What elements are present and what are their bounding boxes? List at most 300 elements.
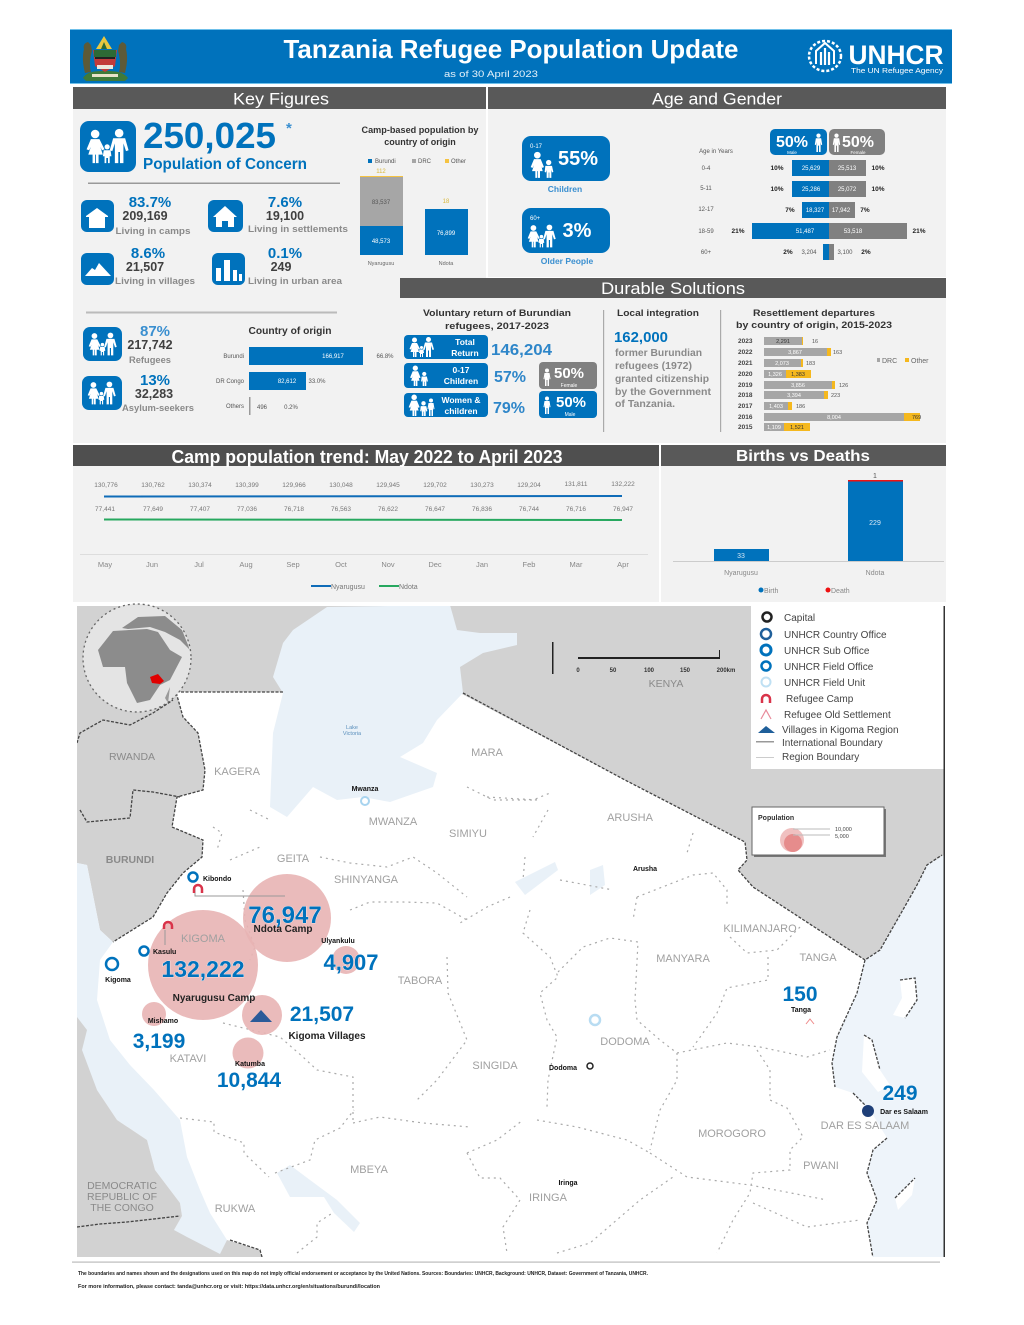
header banner: [70, 29, 952, 84]
stat: living in urban area: 0.1%: [268, 245, 302, 262]
line chart: camp population: May: [98, 560, 112, 569]
voluntary return block: refugees, 2017-2023: [445, 321, 549, 332]
line chart: camp population: 77,649: [143, 506, 163, 513]
local integration block: former Burundian: [615, 348, 702, 359]
map region and country labels: BURUNDI: [106, 854, 154, 866]
local integration block: Local integration: [617, 308, 699, 319]
stat: refugees: Refugees: [129, 355, 171, 366]
map figures: Ndota Camp: [254, 924, 312, 935]
icon: family tile: [80, 121, 136, 172]
map region and country labels: IRINGA: [529, 1192, 568, 1204]
stacked chart: camp-based population: Nyarugusu: [368, 261, 394, 267]
icon: Tanzania coat of arms: [83, 36, 128, 81]
map region and country labels: PWANI: [803, 1160, 839, 1172]
title: Tanzania Refugee Population Update: [284, 34, 738, 64]
population pyramid: 25,513: [838, 166, 857, 172]
bar chart: resettlement departures: 2016: [738, 414, 753, 421]
bar chart: resettlement departures: 2,291: [776, 339, 790, 345]
heading: age and gender: Age and Gender: [652, 90, 782, 108]
stat: asylum-seekers: 13%: [140, 372, 170, 389]
stacked chart: camp-based population: 112: [376, 169, 386, 175]
population pyramid: 25,629: [802, 166, 821, 172]
bar chart: resettlement departures: [736, 308, 929, 431]
map region and country labels: SIMIYU: [449, 828, 487, 840]
date subtitle: as of 30 April 2023: [444, 69, 538, 80]
population pyramid: 10%: [770, 186, 784, 193]
bar chart: births and deaths: 1: [873, 473, 877, 480]
legend: map symbols: Capital: [784, 613, 815, 624]
stat: asylum-seekers: Asylum-seekers: [122, 403, 194, 414]
international boundaries: [77, 692, 942, 1258]
bar chart: resettlement departures: 163: [833, 350, 842, 356]
tile: older people: Older People: [541, 256, 593, 266]
bar chart: country of origin: 66.8%: [376, 354, 394, 360]
map region and country labels: [87, 678, 909, 1215]
stat: living in urban area: Living in urban area: [248, 276, 343, 287]
tile: older people: 60+: [530, 216, 541, 222]
tile: female share: Female: [561, 383, 578, 389]
map region and country labels: KILIMANJARO: [723, 923, 797, 935]
tile: male share: 50%: [556, 394, 586, 411]
map scale bar: 200km: [717, 668, 735, 674]
map place markers: Dodoma: [549, 1065, 577, 1072]
population pyramid: 2%: [783, 249, 793, 256]
bar chart: country of origin: 496: [257, 405, 268, 411]
map region and country labels: THE CONGO: [90, 1202, 154, 1214]
stat: living in camps: 209,169: [122, 209, 168, 223]
tile: women and children: 79%: [493, 400, 525, 417]
stacked chart: camp-based population: DRC: [418, 159, 432, 165]
stat: living in settlements: [208, 194, 348, 235]
stat: living in villages: Living in villages: [115, 276, 195, 287]
stat: living in urban area: [212, 245, 343, 287]
stacked chart: camp-based population: Other: [451, 159, 466, 165]
tile: children: 57%: [494, 369, 526, 386]
line chart: camp population: 129,966: [282, 482, 306, 489]
map scale bar: 0: [576, 668, 580, 674]
total population figure: [143, 115, 307, 173]
map figures: 249: [882, 1082, 918, 1105]
male share tile: 50%: [776, 134, 808, 151]
stat: living in settlements: 7.6%: [268, 194, 302, 211]
population pyramid: 18,327: [806, 208, 825, 214]
map region and country labels: DODOMA: [600, 1036, 650, 1048]
map place markers: Arusha: [633, 866, 657, 873]
total population figure: Population of Concern: [143, 156, 307, 173]
legend: population bubbles: 10,000: [835, 827, 852, 833]
female share tile: [829, 129, 885, 155]
map figures: 76,947: [248, 902, 322, 929]
tile: female share: 50%: [554, 365, 584, 382]
stat: living in camps: 83.7%: [129, 194, 171, 211]
line chart: camp population: 132,222: [611, 481, 635, 488]
tile: total return: [404, 335, 552, 359]
map figures: 21,507: [290, 1003, 354, 1026]
legend: map symbols: Refugee Camp: [786, 694, 854, 705]
population pyramid: 2%: [861, 249, 871, 256]
stat: refugees: 87%: [140, 323, 170, 340]
bar chart: resettlement departures: 3,867: [788, 350, 802, 356]
tile: male share: Male: [565, 412, 576, 418]
map figures: [133, 902, 918, 1105]
map region and country labels: KATAVI: [170, 1053, 206, 1065]
bar chart: resettlement departures: 186: [796, 404, 805, 410]
bar chart: resettlement departures: 183: [806, 361, 815, 367]
male share tile: [770, 129, 827, 155]
population pyramid: 0-4: [702, 166, 711, 172]
stacked chart: camp-based population: country of origin: [384, 137, 456, 147]
female share tile: 50%: [842, 134, 874, 151]
bar chart: resettlement departures: 1,109: [767, 425, 781, 431]
map figures: 132,222: [161, 956, 245, 982]
map place markers: [105, 786, 928, 1187]
bar chart: resettlement departures: 223: [831, 393, 840, 399]
legend: map symbols: UNHCR Field Office: [784, 662, 874, 673]
line chart: camp population: 130,374: [188, 482, 212, 489]
line chart: camp population: Apr: [617, 560, 629, 569]
line chart: camp population: 129,945: [376, 482, 400, 489]
line chart: camp population: 76,647: [425, 506, 445, 513]
population pyramid: 3,204: [801, 250, 817, 256]
bar chart: births and deaths: Ndota: [866, 570, 884, 577]
tile: children: 55%: [558, 148, 598, 170]
stat: refugees: [83, 323, 173, 366]
legend: map symbols: UNHCR Field Unit: [784, 678, 865, 689]
population pyramid: Age in Years: [699, 149, 733, 155]
map scale bar: 50: [610, 668, 617, 674]
line chart: camp population: Sep: [286, 560, 300, 569]
map region and country labels: ARUSHA: [607, 812, 654, 824]
heading: camp population trend: Camp population trend: May 2022 to April 2023: [172, 447, 562, 467]
bar chart: country of origin: DR Congo: [216, 379, 245, 385]
bar chart: resettlement departures: 2020: [738, 371, 753, 378]
map figures: Nyarugusu Camp: [173, 993, 255, 1004]
stacked chart: camp-based population: [360, 125, 478, 267]
stacked chart: camp-based population: 18: [443, 199, 450, 205]
map place markers: Mwanza: [352, 786, 379, 793]
bar chart: country of origin: Burundi: [223, 354, 244, 360]
line chart: camp population: 76,622: [378, 506, 398, 513]
legend: map symbols: Villages in Kigoma Region: [782, 725, 899, 736]
stacked chart: camp-based population: 48,573: [372, 239, 391, 245]
population pyramid: 21%: [731, 228, 745, 235]
total population figure: *: [286, 120, 292, 137]
stat: living in villages: 8.6%: [131, 245, 165, 262]
bar chart: country of origin: 0.2%: [284, 405, 298, 411]
line chart: camp population: Feb: [523, 560, 535, 569]
bar chart: country of origin: [216, 325, 394, 415]
map place markers: Kibondo: [203, 876, 231, 883]
stat: living in urban area: 249: [271, 260, 291, 274]
bar chart: country of origin: 166,917: [322, 354, 344, 360]
line chart: camp population: 76,563: [331, 506, 351, 513]
population pyramid: [698, 129, 926, 260]
map region and country labels: TABORA: [398, 975, 443, 987]
panel: camp population trend: [73, 445, 659, 602]
bar chart: resettlement departures: 2021: [738, 360, 753, 367]
population pyramid: 21%: [912, 228, 926, 235]
map place markers: Tanga: [791, 1007, 811, 1014]
line chart: camp population: Jun: [146, 560, 158, 569]
bar chart: births and deaths: Death: [831, 588, 850, 595]
tile: older people: 3%: [563, 220, 592, 242]
tile: children: [404, 363, 526, 388]
population pyramid: 25,072: [838, 187, 857, 193]
stat: living in villages: [81, 245, 195, 287]
legend: population bubbles: 5,000: [835, 834, 849, 840]
map scale bar: 100: [644, 668, 655, 674]
legend: population bubbles: [752, 807, 886, 857]
stacked chart: camp-based population: Ndota: [439, 261, 454, 267]
tile: older people: [522, 208, 610, 266]
stat: asylum-seekers: [82, 372, 194, 414]
map region and country labels: KENYA: [649, 678, 683, 690]
population pyramid: 7%: [785, 207, 795, 214]
heading: durable solutions: Durable Solutions: [601, 279, 745, 298]
bar chart: resettlement departures: by country of origin, 2015-2023: [736, 320, 892, 331]
map: Tanzania refugee locations: KIGOMA: [181, 933, 226, 945]
map region and country labels: SINGIDA: [472, 1060, 518, 1072]
line chart: camp population: 129,204: [517, 482, 541, 489]
footer notes: [72, 1262, 940, 1290]
line chart: camp population: Nov: [381, 560, 395, 569]
map figures: Kigoma Villages: [288, 1031, 366, 1042]
map figures: 3,199: [133, 1030, 185, 1053]
bar chart: resettlement departures: 2022: [738, 349, 753, 356]
bar chart: resettlement departures: 126: [839, 383, 848, 389]
bar chart: resettlement departures: 2023: [738, 338, 753, 345]
tile: total return: Return: [451, 348, 479, 358]
population pyramid: 10%: [871, 186, 885, 193]
line chart: camp population: 76,947: [613, 506, 633, 513]
map region and country labels: REPUBLIC OF: [87, 1191, 157, 1203]
map place markers: Kigoma: [105, 977, 131, 984]
camp bubbles: [142, 874, 360, 1068]
tile: children: Children: [444, 376, 478, 386]
map figures: 150: [782, 983, 818, 1006]
line chart: camp population: 76,716: [566, 506, 586, 513]
map region and country labels: DEMOCRATIC: [87, 1180, 157, 1192]
bar chart: births and deaths: 229: [869, 520, 881, 527]
heading: key figures: Key Figures: [233, 90, 329, 108]
local integration block: of Tanzania.: [615, 399, 675, 410]
map region and country labels: MWANZA: [369, 816, 418, 828]
line chart: camp population: 77,407: [190, 506, 210, 513]
bar chart: births and deaths: [673, 473, 944, 595]
bar chart: resettlement departures: 1,383: [791, 372, 805, 378]
bar chart: resettlement departures: 2018: [738, 392, 753, 399]
tile: female share: [539, 362, 597, 389]
line chart: camp population: [80, 481, 648, 591]
voluntary return block: Voluntary return of Burundian: [423, 308, 571, 319]
map scale bar: [552, 642, 735, 674]
map region and country labels: TANGA: [799, 952, 837, 964]
map region and country labels: MANYARA: [656, 953, 710, 965]
population pyramid: 7%: [860, 207, 870, 214]
line chart: camp population: 130,048: [329, 482, 353, 489]
map region and country labels: SHINYANGA: [334, 874, 399, 886]
map region and country labels: Victoria: [343, 731, 362, 737]
population pyramid: 5-11: [700, 186, 712, 192]
panel: births vs deaths: [661, 445, 946, 602]
legend: map symbols: UNHCR Sub Office: [784, 646, 870, 657]
local integration block: granted citizenship: [615, 374, 709, 385]
bar chart: resettlement departures: Resettlement departures: [753, 308, 875, 319]
map region and country labels: DAR ES SALAAM: [821, 1120, 909, 1132]
bar chart: country of origin: 33.0%: [308, 379, 326, 385]
line chart: camp population: Aug: [239, 560, 253, 569]
tile: male share: [539, 391, 597, 418]
region boundaries: [180, 787, 860, 1253]
line chart: camp population: Jan: [476, 560, 488, 569]
legend: map symbols: Region Boundary: [782, 752, 859, 763]
tile: women and children: [404, 393, 525, 417]
population pyramid: 53,518: [844, 229, 863, 235]
population pyramid: 25,286: [802, 187, 821, 193]
line chart: camp population: 130,399: [235, 482, 259, 489]
bar chart: births and deaths: Birth: [764, 588, 778, 595]
local integration block: [614, 308, 712, 410]
footer notes: For more information, please contact: tanda@unhcr.org or visit: https://data.unhcr.org/en/situations/burundi/location: [78, 1284, 380, 1290]
bar chart: births and deaths: 33: [737, 553, 745, 560]
map figures: 4,907: [323, 950, 379, 975]
map region and country labels: GEITA: [277, 853, 310, 865]
bar chart: resettlement departures: Other: [911, 358, 929, 365]
line chart: camp population: 130,273: [470, 482, 494, 489]
map region and country labels: MARA: [471, 747, 504, 759]
tile: women and children: children: [444, 406, 478, 416]
bar chart: country of origin: Others: [226, 404, 244, 410]
heading: births vs deaths: Births vs Deaths: [736, 448, 870, 465]
population pyramid: 17,942: [832, 208, 851, 214]
footer notes: The boundaries and names shown and the designations used on this map do not imply official endorsement or acceptance by the United Nations. Sources: Boundaries: UNHCR, Background: UNHCR, Dataset: Government of Tanzania, UNHCR.: [78, 1271, 649, 1277]
map region and country labels: MOROGORO: [698, 1128, 766, 1140]
line chart: camp population: 129,702: [423, 482, 447, 489]
line chart: camp population: Jul: [194, 560, 204, 569]
inset: globe locator: [83, 604, 191, 712]
line chart: camp population: Ndota: [399, 584, 418, 591]
line chart: camp population: 76,718: [284, 506, 304, 513]
line chart: camp population: 131,811: [564, 481, 588, 488]
bar chart: resettlement departures: 1,403: [769, 404, 783, 410]
map region and country labels: RWANDA: [109, 751, 155, 763]
stat: living in villages: 21,507: [126, 260, 164, 274]
map region and country labels: MBEYA: [350, 1164, 389, 1176]
line chart: camp population: 77,036: [237, 506, 257, 513]
stat: asylum-seekers: 32,283: [135, 387, 173, 401]
bar chart: resettlement departures: 2,073: [775, 361, 789, 367]
population pyramid: 60+: [701, 250, 712, 256]
map region and country labels: RUKWA: [215, 1203, 256, 1215]
UNHCR logo text: UNHCR: [848, 40, 944, 70]
population pyramid: 18-59: [698, 229, 714, 235]
line chart: camp population: 77,441: [95, 506, 115, 513]
map place markers: Iringa: [558, 1180, 578, 1187]
line chart: camp population: Oct: [335, 560, 348, 569]
stacked chart: camp-based population: 76,899: [437, 231, 456, 237]
tile: women and children: Women &: [441, 395, 481, 405]
line chart: camp population: 76,744: [519, 506, 539, 513]
map place markers: Katumba: [235, 1061, 265, 1068]
map scale bar: 150: [680, 668, 691, 674]
stat: living in camps: Living in camps: [116, 226, 190, 237]
population pyramid: 10%: [871, 165, 885, 172]
population pyramid: 3,100: [837, 250, 853, 256]
bar chart: resettlement departures: DRC: [882, 358, 897, 365]
population pyramid: 12-17: [698, 207, 714, 213]
map place markers: Dar es Salaam: [880, 1109, 928, 1116]
bar chart: resettlement departures: 16: [812, 339, 818, 345]
female share tile: Female: [850, 150, 866, 155]
tile: children: Children: [548, 184, 582, 194]
legend: map symbols: [751, 606, 944, 769]
local integration block: by the Government: [615, 387, 712, 398]
bar chart: resettlement departures: 769: [912, 415, 921, 421]
stat: living in settlements: Living in settlements: [248, 224, 348, 235]
map figures: 10,844: [217, 1069, 281, 1092]
line chart: camp population: 130,762: [141, 482, 165, 489]
line chart: camp population: Nyarugusu: [331, 584, 365, 591]
tile: children: 0-17: [530, 144, 543, 150]
panel: durable solutions: [400, 278, 946, 443]
map region and country labels: Lake: [346, 725, 358, 731]
line chart: camp population: 130,776: [94, 482, 118, 489]
map: Tanzania refugee locations: [77, 604, 945, 1258]
legend: map symbols: Refugee Old Settlement: [784, 710, 891, 721]
map region and country labels: KAGERA: [214, 766, 261, 778]
tile: children: [522, 136, 610, 194]
line chart: camp population: 76,836: [472, 506, 492, 513]
stat: refugees: 217,742: [127, 338, 173, 352]
bar chart: resettlement departures: 3,394: [787, 393, 801, 399]
line chart: camp population: Dec: [428, 560, 442, 569]
bar chart: country of origin: Country of origin: [248, 325, 332, 337]
bar chart: resettlement departures: 2019: [738, 382, 753, 389]
bar chart: resettlement departures: 2017: [738, 403, 753, 410]
stacked chart: camp-based population: 83,537: [372, 200, 391, 206]
tile: children: 0-17: [452, 365, 470, 375]
stat: living in camps: [81, 194, 190, 237]
local integration block: refugees (1972): [615, 361, 692, 372]
bar chart: resettlement departures: 1,326: [768, 372, 782, 378]
bar chart: births and deaths: Nyarugusu: [724, 570, 758, 577]
stacked chart: camp-based population: Burundi: [375, 159, 396, 165]
panel: age and gender: [488, 87, 946, 277]
stat: living in settlements: 19,100: [266, 209, 304, 223]
population pyramid: 10%: [770, 165, 784, 172]
tile: total return: Total: [455, 337, 475, 347]
bar chart: resettlement departures: 8,004: [827, 415, 841, 421]
map place markers: Mishamo: [148, 1018, 178, 1025]
UNHCR logo text: The UN Refugee Agency: [851, 68, 944, 75]
bar chart: country of origin: 82,612: [278, 379, 297, 385]
map place markers: Kasulu: [153, 949, 176, 956]
population pyramid: 51,487: [796, 229, 815, 235]
bar chart: resettlement departures: 3,856: [791, 383, 805, 389]
map place markers: Ulyankulu: [321, 938, 355, 945]
legend: population bubbles: Population: [758, 815, 794, 822]
panel: key figures: [73, 87, 486, 443]
bar chart: resettlement departures: 2015: [738, 424, 753, 431]
male share tile: Male: [787, 150, 797, 155]
icon: UNHCR emblem: [809, 41, 841, 71]
voluntary return block: [404, 308, 597, 418]
bar chart: resettlement departures: 1,521: [790, 425, 804, 431]
line chart: camp population: Mar: [570, 560, 583, 569]
tile: total return: 146,204: [491, 342, 552, 359]
legend: map symbols: International Boundary: [782, 738, 883, 749]
local integration block: 162,000: [614, 329, 668, 346]
